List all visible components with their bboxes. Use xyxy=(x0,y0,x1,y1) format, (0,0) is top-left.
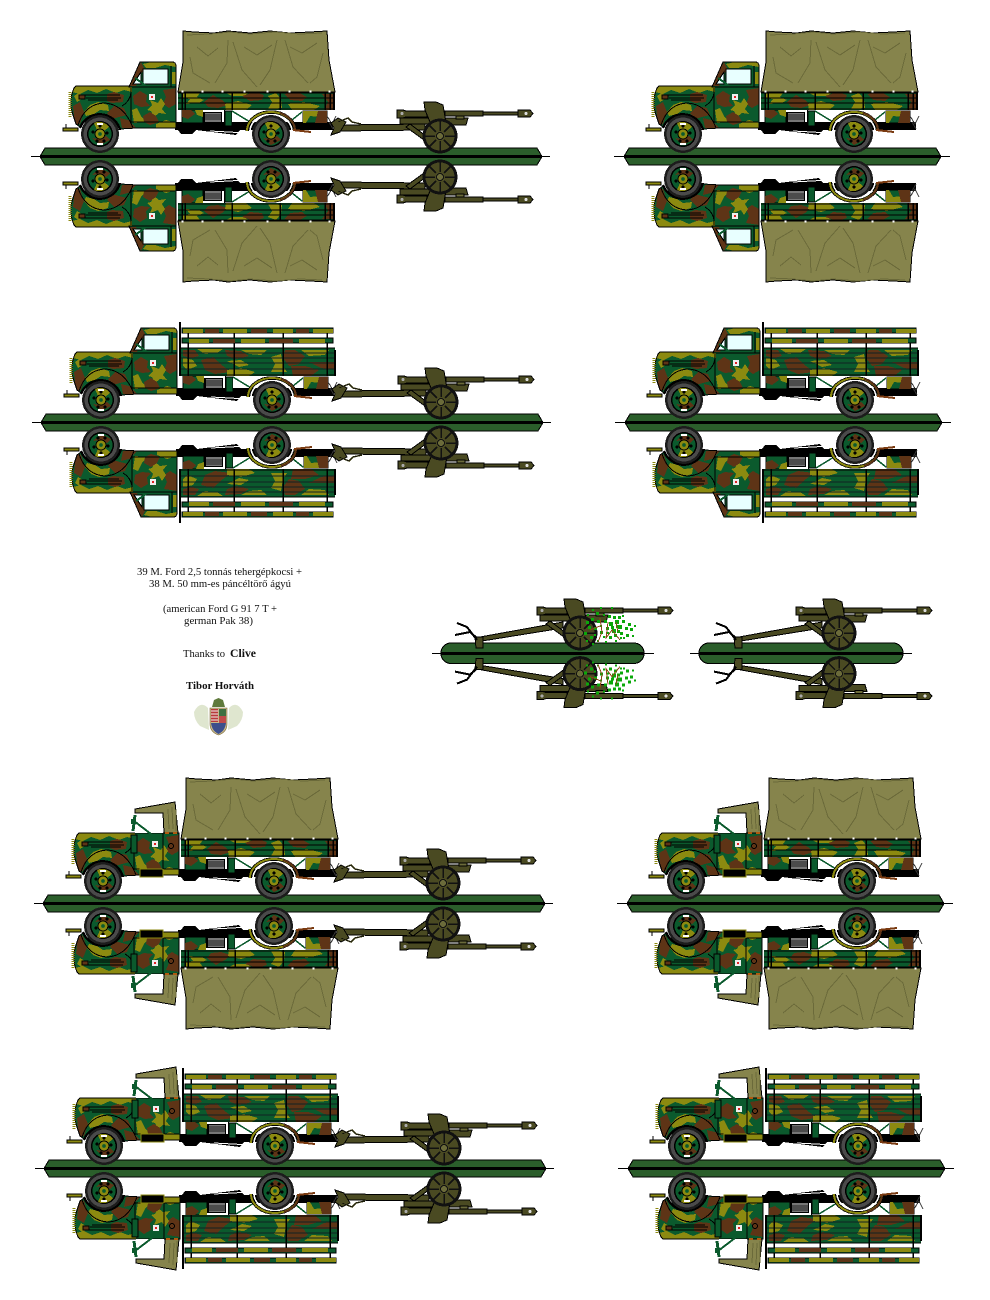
foliage upper xyxy=(584,607,636,645)
icon: Hungarian coat of arms with angels xyxy=(194,698,243,735)
truck upper view xyxy=(649,778,922,900)
text block: vehicle description and credits: Tibor Horváth xyxy=(186,681,254,692)
panel: bottom right truck with open cab and open bed xyxy=(618,1067,954,1270)
ground bar xyxy=(614,148,950,165)
text block: vehicle description and credits: Clive xyxy=(230,646,257,660)
panel: gun without foliage xyxy=(690,599,932,708)
gun upper view xyxy=(455,599,673,649)
panel: top left truck with tilt and towed gun xyxy=(31,31,550,282)
truck and gun mirrored view xyxy=(63,160,533,282)
truck upper view xyxy=(646,31,919,153)
gun upper view xyxy=(335,1114,537,1164)
gun mirrored view xyxy=(714,658,932,708)
ground bar xyxy=(615,414,951,431)
truck upper view xyxy=(647,322,920,419)
gun upper view xyxy=(334,849,536,899)
truck and gun mirrored view xyxy=(67,1172,537,1270)
truck mirrored view xyxy=(647,426,920,523)
gun upper view xyxy=(714,599,932,649)
ground bar xyxy=(34,895,553,912)
panel: third row right truck with open cab and tilt xyxy=(617,778,953,1029)
text block: vehicle description and credits: 38 M. 50 mm-es páncéltörő ágyú xyxy=(149,579,292,590)
truck mirrored view xyxy=(650,1172,923,1270)
panel: second row right truck with open bed xyxy=(615,322,951,523)
text block: vehicle description and credits: (american Ford G 91 7 T + xyxy=(163,604,277,615)
rounded ground bar xyxy=(690,643,912,664)
gun upper view xyxy=(332,368,534,418)
text block: vehicle description and credits: Thanks to xyxy=(183,649,225,660)
ground bar xyxy=(617,895,953,912)
truck upper view xyxy=(650,1067,923,1165)
ground bar xyxy=(31,148,550,165)
truck upper view xyxy=(64,322,337,419)
panel: top right truck with tilt xyxy=(614,31,950,282)
text block: vehicle description and credits: german Pak 38) xyxy=(184,616,254,627)
panel: second row left truck with open bed and towed gun xyxy=(32,322,551,523)
gun upper view xyxy=(331,102,533,152)
truck mirrored view xyxy=(646,160,919,282)
truck upper view xyxy=(66,778,339,900)
truck and gun mirrored view xyxy=(66,907,536,1029)
text block: vehicle description and credits xyxy=(137,567,302,692)
text block: vehicle description and credits: 39 M. Ford 2,5 tonnás tehergépkocsi + xyxy=(137,567,302,578)
ground bar xyxy=(35,1160,554,1177)
truck upper view xyxy=(67,1067,340,1165)
panel: bottom left truck with open cab, open bed and towed gun xyxy=(35,1067,554,1270)
ground bar xyxy=(32,414,551,431)
panel: gun with foliage xyxy=(432,599,673,708)
gun mirrored view with foliage xyxy=(455,658,673,708)
truck and gun mirrored view xyxy=(64,426,534,523)
panel: third row left truck with open cab, tilt and towed gun xyxy=(34,778,553,1029)
ground bar xyxy=(618,1160,954,1177)
truck mirrored view xyxy=(649,907,922,1029)
truck upper view xyxy=(63,31,336,153)
rounded ground bar xyxy=(432,643,654,664)
